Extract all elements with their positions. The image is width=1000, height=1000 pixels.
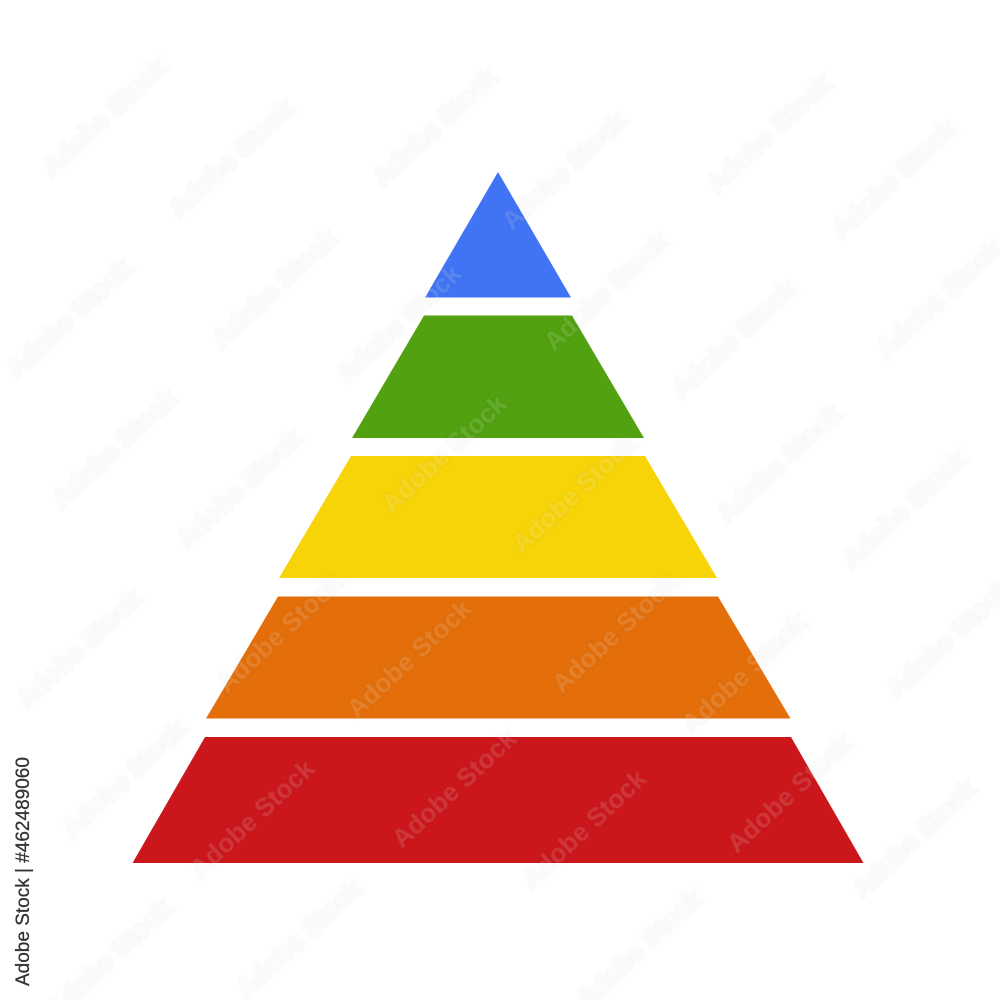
pyramid bbox=[132, 172, 864, 863]
stock watermarks: Adobe Stock bbox=[826, 113, 963, 244]
stock watermarks: Adobe Stock bbox=[1, 253, 138, 384]
tier 5: red bbox=[132, 737, 864, 863]
stock watermarks: Adobe Stock bbox=[711, 398, 848, 529]
stock watermarks: Adobe Stock bbox=[331, 258, 468, 389]
stock id label: Adobe Stock | #462489060 bbox=[13, 757, 34, 986]
stock watermarks: Adobe Stock bbox=[367, 61, 504, 192]
stock watermarks: Adobe Stock bbox=[341, 593, 478, 724]
stock watermarks: Adobe Stock bbox=[184, 753, 321, 884]
stock watermarks: Adobe Stock bbox=[546, 568, 683, 699]
stock watermarks: Adobe Stock bbox=[846, 773, 983, 904]
stock watermarks: Adobe Stock bbox=[676, 608, 813, 739]
stock watermarks: Adobe Stock bbox=[496, 105, 633, 236]
stock watermarks: Adobe Stock bbox=[11, 583, 148, 714]
stock watermarks: Adobe Stock bbox=[836, 443, 973, 574]
stock watermarks: Adobe Stock bbox=[56, 713, 193, 844]
stock watermarks: Adobe Stock bbox=[231, 873, 368, 1000]
stock watermarks: Adobe Stock bbox=[386, 723, 523, 854]
stock watermarks: Adobe Stock bbox=[46, 383, 183, 514]
stock watermarks: Adobe Stock bbox=[206, 223, 343, 354]
stock watermarks: Adobe Stock bbox=[163, 93, 300, 224]
stock watermarks: Adobe Stock bbox=[666, 273, 803, 404]
stock watermarks: Adobe Stock bbox=[516, 763, 653, 894]
stock watermarks: Adobe Stock bbox=[171, 423, 308, 554]
tier 3: yellow bbox=[279, 456, 717, 578]
tier 4: orange bbox=[206, 596, 790, 718]
stock watermarks: Adobe Stock bbox=[538, 226, 675, 357]
tier 1: blue apex bbox=[425, 172, 571, 298]
stock watermarks: Adobe Stock bbox=[211, 568, 348, 699]
stock watermarks: Adobe Stock bbox=[36, 51, 173, 182]
stock watermarks: Adobe Stock bbox=[376, 388, 513, 519]
stock watermarks: Adobe Stock bbox=[701, 68, 838, 199]
stock watermarks: Adobe Stock bbox=[721, 728, 858, 859]
stock watermarks: Adobe Stock bbox=[506, 428, 643, 559]
tier 2: green bbox=[352, 316, 644, 438]
